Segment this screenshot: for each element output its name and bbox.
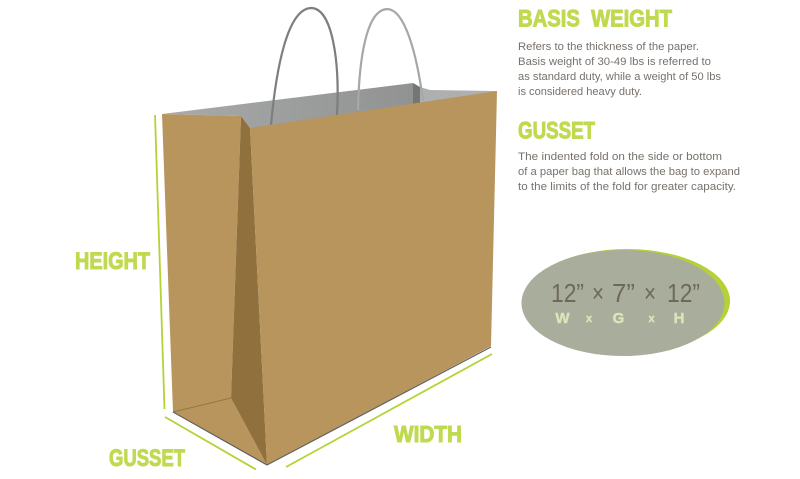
dimensions key: x: [648, 313, 655, 325]
text block: gusset description: of a paper bag that allows the bag to expand: [518, 166, 740, 178]
heading: gusset: GUSSET: [518, 118, 595, 144]
text block: basis weight description: Refers to the thickness of the paper.: [518, 41, 699, 53]
gusset dimension line: [165, 417, 256, 470]
text block: gusset description: The indented fold on the side or bottom: [518, 151, 722, 163]
label: height: HEIGHT: [75, 248, 150, 275]
text block: basis weight description: is considered heavy duty.: [518, 86, 642, 98]
dimensions value: [551, 278, 700, 308]
text block: gusset description: to the limits of the fold for greater capacity.: [518, 181, 736, 193]
front handle: [271, 8, 338, 125]
badge grey ellipse: [522, 250, 724, 356]
text block: basis weight description: Basis weight of 30-49 lbs is referred to: [518, 56, 711, 68]
dimensions key: x: [586, 313, 593, 325]
dimensions value: 7”: [612, 278, 635, 308]
dimensions value: 12”: [667, 278, 700, 308]
dimensions value: 12”: [551, 278, 584, 308]
bag interior corner shadow: [413, 83, 420, 110]
bottom gusset fold: [173, 398, 267, 465]
text block: gusset description: [518, 151, 740, 193]
bag interior back wall: [162, 83, 413, 128]
left gusset panel: [162, 114, 241, 412]
dimensions value: ×: [644, 278, 656, 308]
bag interior side wall: [420, 87, 497, 108]
text block: basis weight description: as standard duty, while a weight of 50 lbs: [518, 71, 722, 83]
text block: basis weight description: [518, 41, 722, 98]
size badge: [522, 249, 730, 356]
bag bottom edge: [173, 347, 491, 465]
front panel: [250, 91, 497, 465]
inner gusset fold: [231, 116, 267, 465]
badge lime shadow ellipse: [524, 249, 730, 353]
dimensions key: W: [555, 310, 570, 327]
dimensions key: H: [674, 310, 684, 327]
dimensions key: [555, 310, 684, 327]
heading: basis weight: BASIS WEIGHT: [518, 6, 672, 32]
paper bag illustration: [162, 8, 497, 465]
width dimension line: [286, 354, 492, 467]
label: width: WIDTH: [394, 421, 462, 447]
height dimension line: [155, 115, 164, 409]
dimensions value: ×: [592, 278, 604, 308]
label: gusset: GUSSET: [109, 445, 185, 472]
back handle: [358, 9, 423, 110]
dimensions key: G: [613, 310, 624, 327]
